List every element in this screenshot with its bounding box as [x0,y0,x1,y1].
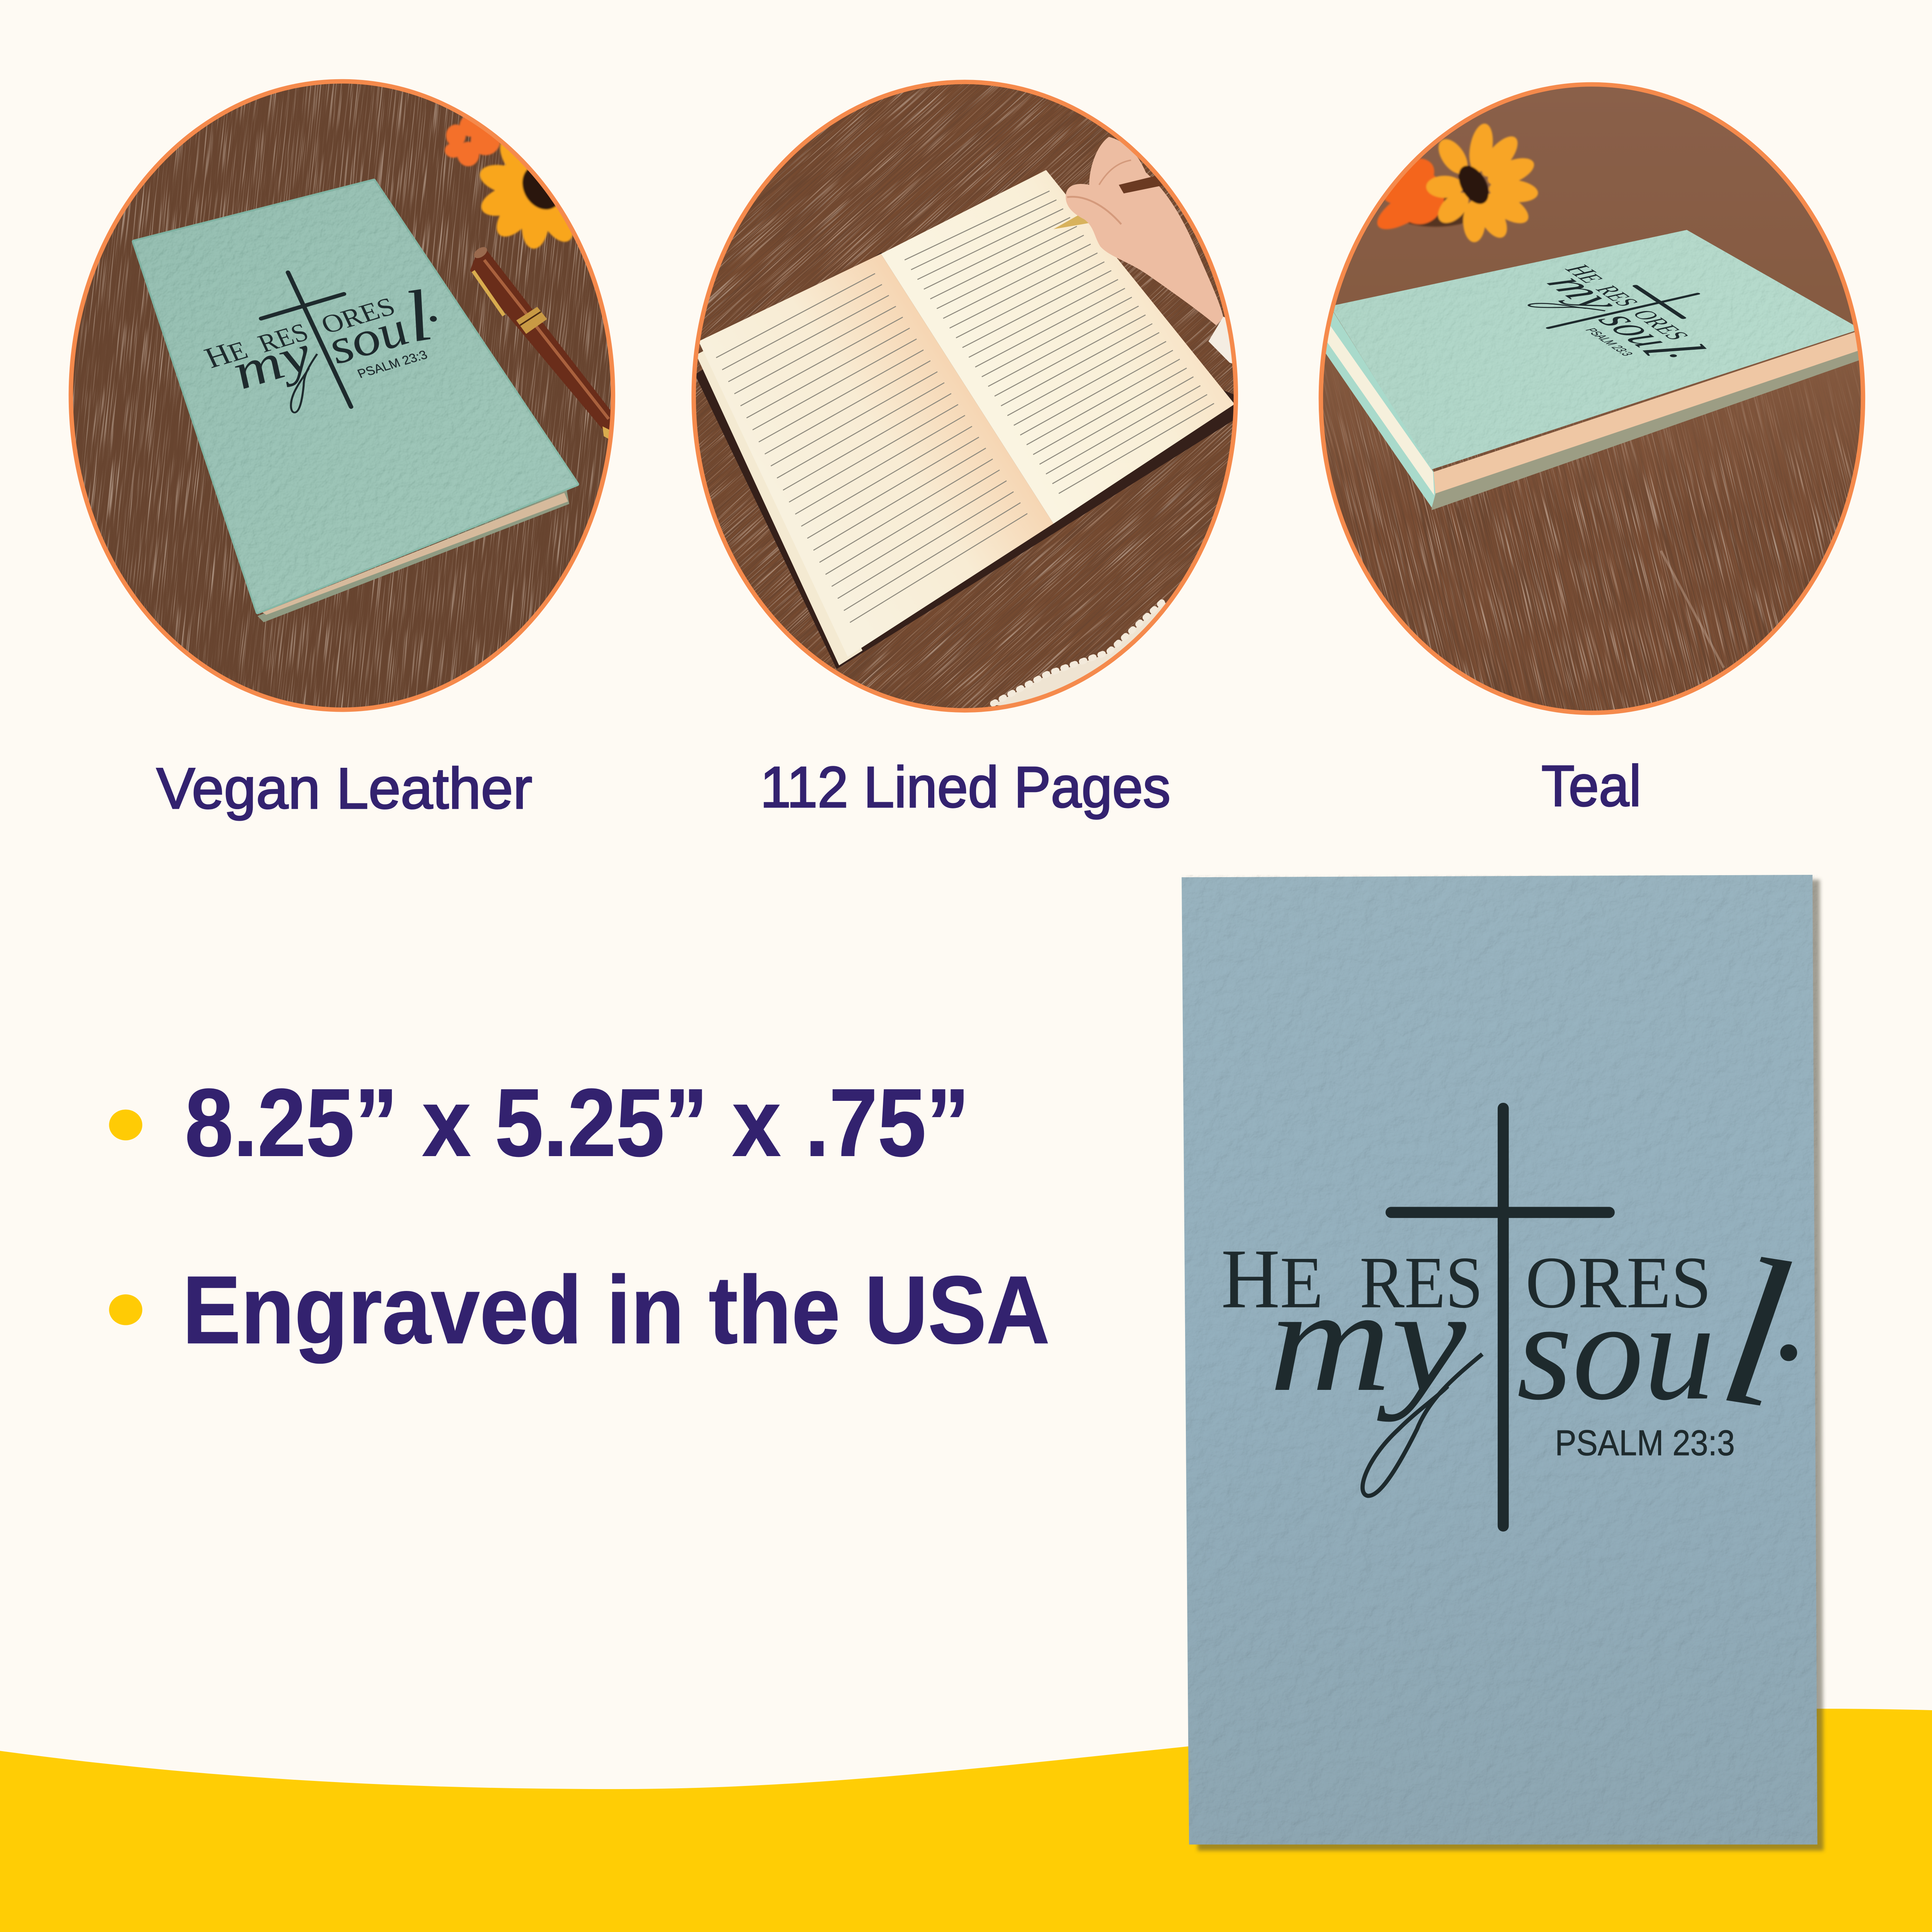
flower [445,115,597,250]
engraving: . [410,278,447,332]
engraving: HE [199,332,252,374]
left page rules [716,274,1027,622]
photo circle: teal notebook [1155,0,1932,876]
notebook cover [123,172,592,622]
engraving: ORES [1625,308,1696,342]
engraving [180,236,468,440]
engraving: my [1534,272,1636,314]
engraving: PSALM 23:3 [1582,327,1636,357]
bullet: dimensions: 8.25” x 5.25” x .75” [185,1069,970,1176]
engraving: soul [318,275,440,374]
engraving: soul [1586,309,1723,361]
leather cover [1182,875,1817,1845]
engraving: my [222,325,322,400]
flower [1371,122,1539,243]
engraved verse reference: PSALM 23:3 [1555,1423,1735,1463]
engraved word: he: HE [1221,1231,1323,1326]
photo circle: vegan leather notebook [69,79,615,712]
gold pen tip [1053,213,1089,229]
hand [1066,137,1223,325]
caption: vegan leather: Vegan Leather [156,756,532,821]
rug [993,600,1189,714]
engraved word part: ores: ORES [1526,1242,1711,1323]
pen barrel [1119,174,1166,194]
engraving: HE [1557,262,1614,285]
yellow wave [0,1709,1932,1932]
engraved script: my: my [1269,1258,1468,1422]
pen [470,245,612,441]
book cover edge [695,253,1240,669]
cross [1386,1103,1615,1532]
main notebook [1182,875,1823,1851]
engraving [1484,252,1767,374]
engraving: RES [1589,284,1645,308]
right page [881,170,1235,524]
engraving: PSALM 23:3 [355,348,430,381]
engraved word part: res: RES [1360,1242,1483,1323]
drop shadow [1190,880,1823,1851]
caption: lined pages: 112 Lined Pages [760,755,1170,820]
sleeve cuff [1209,317,1237,365]
plank seam [1661,551,1724,668]
engraving: . [1657,344,1721,362]
circle outline [71,81,613,710]
right page rules [905,191,1214,493]
caption: teal: Teal [1541,753,1641,818]
engraving: ORES [316,292,400,339]
circle outline [1321,84,1863,713]
engraved script: soul: . [1774,1233,1810,1390]
page stack [696,345,862,665]
decorative swash [1362,1354,1482,1496]
engraving: RES [253,318,313,358]
engraved script: soul: soul [1517,1212,1803,1453]
left page [699,254,1053,657]
leather texture [1182,875,1817,1845]
photo circle: lined pages [345,0,1580,1019]
circle outline [694,82,1236,710]
notebook [1318,222,1867,510]
bullet: engraved in the USA: Engraved in the USA [182,1256,1050,1364]
